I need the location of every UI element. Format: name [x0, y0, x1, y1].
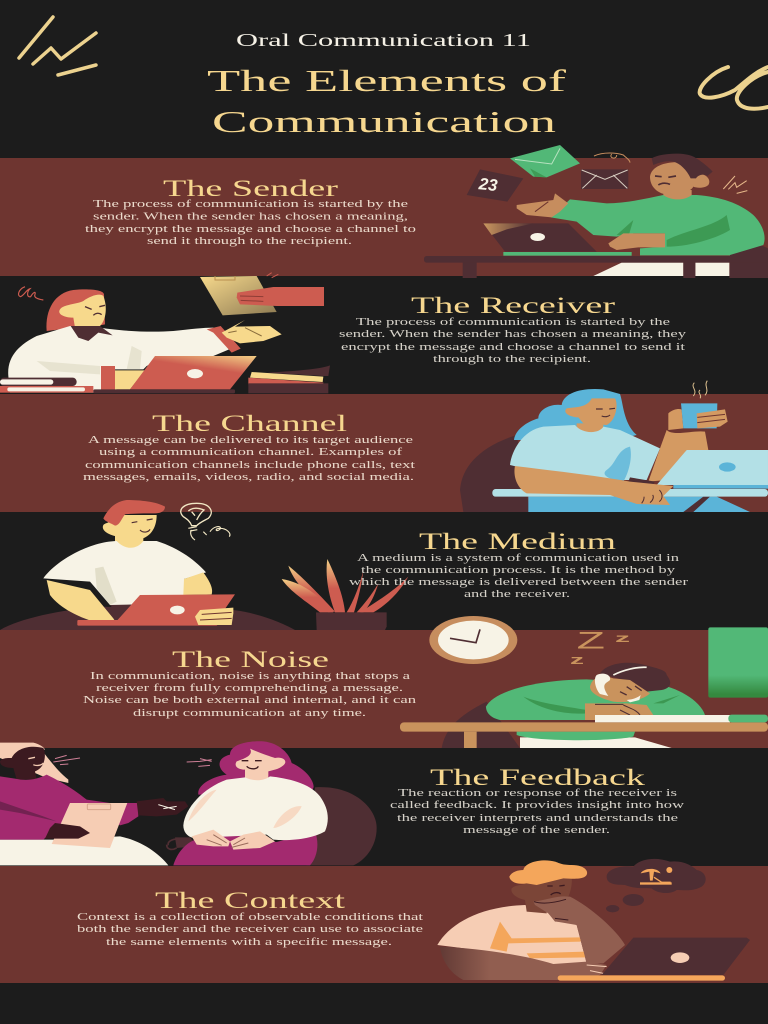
illustration: thinking person with laptop [437, 859, 750, 981]
subtitle: Oral Communication 11 [236, 30, 531, 50]
section: the sender: The Sender [163, 176, 339, 201]
section: the context [77, 888, 423, 948]
title [207, 63, 567, 139]
section: the channel [83, 411, 415, 483]
illustration: clock [429, 616, 517, 664]
section: the medium: which the message is delivered between the sender [349, 576, 689, 588]
section: the sender: sender. When the sender has chosen a meaning, [93, 210, 408, 222]
section: the noise: disrupt communication at any time. [133, 707, 366, 719]
section: the noise: In communication, noise is anything that stops a [90, 670, 410, 682]
section: the receiver [339, 293, 687, 365]
section: the sender: they encrypt the message and choose a channel to [85, 223, 417, 235]
section: the context: The Context [155, 888, 346, 913]
section: the channel: A message can be delivered to its target audience [88, 434, 413, 446]
illustration: sender at desk [424, 145, 768, 278]
section: the medium: A medium is a system of communication used in [357, 552, 680, 564]
section: the noise: The Noise [172, 647, 329, 672]
illustration: person sleeping at desk: z [615, 631, 630, 645]
section: the feedback [390, 765, 684, 836]
section: the channel: communication channels include phone calls, text [85, 459, 415, 471]
illustration: person with clipboard [0, 743, 188, 865]
section: the feedback: the receiver interprets and understands the [397, 812, 678, 824]
section: the receiver: The process of communication is started by the [356, 316, 670, 328]
section: the receiver: through to the recipient. [433, 353, 591, 365]
illustration: person sleeping at desk: Z [577, 627, 605, 654]
illustration: sender at desk: 23 [477, 174, 499, 195]
illustration: person sleeping at desk: z [570, 652, 585, 667]
section: the sender [85, 176, 417, 247]
illustration: person with coffee and laptop [460, 381, 768, 512]
illustration: woman seated in chair [167, 741, 377, 865]
section: the medium: The Medium [419, 529, 616, 554]
section: the receiver: The Receiver [411, 293, 616, 318]
illustration: man with tablet [0, 500, 295, 630]
section: the noise: receiver from fully comprehending a message. [96, 682, 403, 694]
illustration: receiver at desk [0, 273, 330, 393]
section: the noise: Noise can be both external and internal, and it can [83, 694, 417, 706]
section: the noise [83, 647, 417, 719]
band: sender [0, 158, 768, 276]
title: The Elements of [207, 63, 567, 98]
section: the receiver: sender. When the sender has chosen a meaning, they [339, 328, 687, 340]
section: the feedback: called feedback. It provides insight into how [390, 799, 684, 811]
band: channel [0, 394, 768, 512]
title: Communication [212, 104, 557, 139]
section: the channel: The Channel [152, 411, 347, 436]
section: the medium: the communication process. It is the method by [361, 564, 676, 576]
illustration: plant [282, 559, 408, 630]
decoration: top-right scribble [700, 67, 768, 109]
section: the feedback: The reaction or response of the receiver is [398, 787, 677, 799]
section: the channel: messages, emails, videos, radio, and social media. [83, 471, 414, 483]
section: the sender: The process of communication is started by the [93, 198, 408, 210]
section: the medium [349, 529, 689, 600]
section: the context: both the sender and the receiver can use to associate [77, 923, 423, 935]
decoration: top-left scribble [19, 17, 96, 75]
band: noise [0, 630, 768, 748]
section: the feedback: message of the sender. [463, 824, 610, 836]
illustration: person sleeping at desk [400, 627, 768, 748]
section: the sender: send it through to the recipient. [147, 235, 352, 247]
section: the context: the same elements with a specific message. [106, 936, 392, 948]
band: context [0, 866, 768, 983]
section: the context: Context is a collection of observable conditions that [77, 911, 423, 923]
section: the channel: using a communication channel. Examples of [99, 446, 403, 458]
section: the receiver: encrypt the message and choose a channel to send it [341, 341, 685, 353]
section: the feedback: The Feedback [430, 765, 646, 790]
section: the medium: and the receiver. [464, 588, 570, 600]
